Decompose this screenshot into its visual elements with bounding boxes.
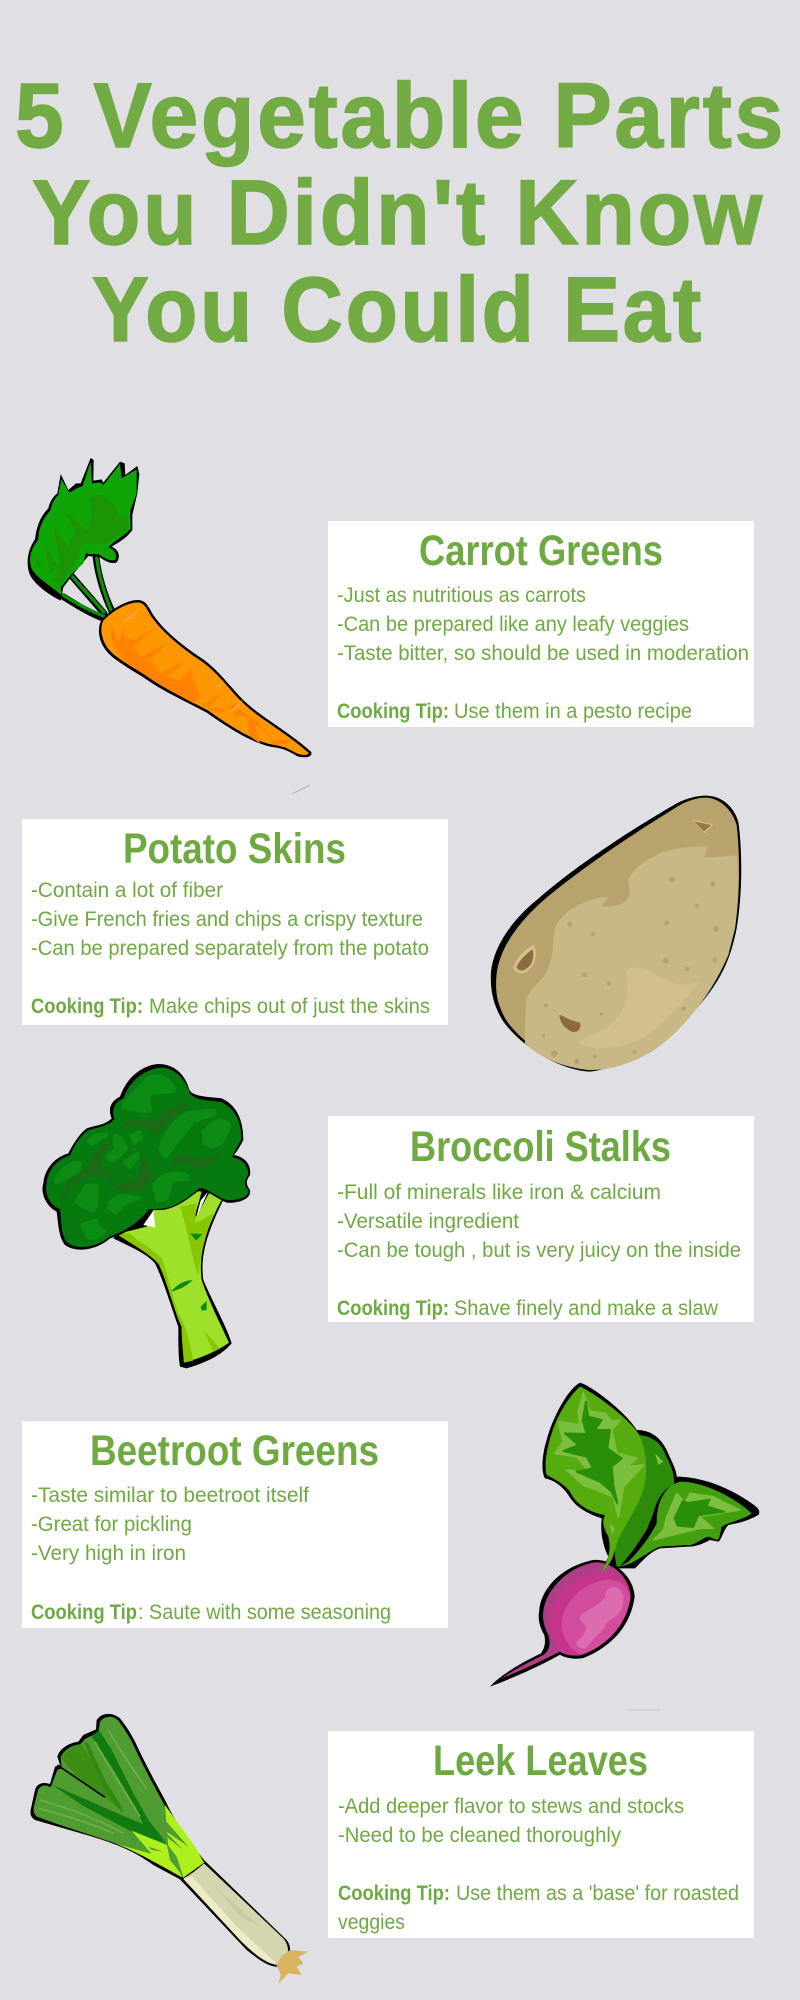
facts: beetroot greens	[31, 1484, 309, 1565]
panel: broccoli stalks	[328, 1116, 754, 1322]
faint stray mark	[627, 1709, 660, 1711]
facts: beetroot greens: -Taste similar to beetroot itself	[31, 1484, 309, 1507]
facts: carrot greens: -Taste bitter, so should be used in moderation	[337, 642, 749, 665]
cooking tip: leek leaves	[338, 1882, 739, 1934]
cooking tip: leek leaves: veggies	[338, 1911, 405, 1934]
illustration: leek	[30, 1714, 308, 1984]
potato eyes	[513, 820, 713, 1032]
panel: leek leaves	[328, 1731, 754, 1938]
cooking tip: carrot greens: Cooking Tip:	[337, 700, 449, 723]
cooking tip: beetroot greens: : Saute with some seasoning	[138, 1601, 391, 1624]
facts: broccoli stalks: -Can be tough , but is very juicy on the inside	[337, 1239, 741, 1262]
panel: carrot greens	[328, 521, 754, 727]
cooking tip: carrot greens	[337, 700, 692, 723]
panel: potato skins	[22, 819, 448, 1025]
facts: potato skins: -Can be prepared separately from the potato	[31, 937, 429, 960]
facts: beetroot greens: -Great for pickling	[31, 1513, 192, 1536]
facts: leek leaves: -Need to be cleaned thoroughly	[338, 1824, 621, 1847]
cooking tip: leek leaves: Use them as a 'base' for roasted	[456, 1882, 739, 1905]
faint stray mark	[292, 785, 310, 794]
facts: beetroot greens: -Very high in iron	[31, 1542, 186, 1565]
heading: carrot greens: Carrot Greens	[419, 527, 663, 575]
title: You Didn't Know	[32, 162, 765, 264]
facts: carrot greens	[337, 584, 749, 665]
cooking tip: potato skins: Cooking Tip:	[31, 995, 143, 1018]
illustration: carrot with greens	[28, 458, 311, 757]
facts: potato skins: -Give French fries and chips a crispy texture	[31, 908, 423, 931]
title: You Could Eat	[92, 259, 704, 361]
cooking tip: potato skins: Make chips out of just the skins	[149, 995, 430, 1018]
broccoli shading	[56, 1077, 229, 1237]
potato speckles	[542, 877, 719, 1064]
cooking tip: carrot greens: Use them in a pesto recipe	[454, 700, 692, 723]
cooking tip: beetroot greens: Cooking Tip	[31, 1601, 137, 1624]
facts: carrot greens: -Can be prepared like any leafy veggies	[337, 613, 689, 636]
illustration: potato	[491, 796, 741, 1072]
title	[15, 65, 786, 361]
cooking tip: broccoli stalks: Shave finely and make a slaw	[454, 1297, 719, 1320]
heading: potato skins: Potato Skins	[123, 825, 346, 873]
heading: beetroot greens: Beetroot Greens	[90, 1427, 379, 1475]
heading: broccoli stalks: Broccoli Stalks	[410, 1123, 671, 1171]
cooking tip: beetroot greens	[31, 1601, 391, 1624]
facts: potato skins	[31, 879, 429, 960]
cooking tip: broccoli stalks	[337, 1297, 719, 1320]
facts: broccoli stalks: -Full of minerals like iron & calcium	[337, 1181, 661, 1204]
facts: broccoli stalks	[337, 1181, 741, 1262]
cooking tip: potato skins	[31, 995, 430, 1018]
illustration: broccoli	[42, 1064, 250, 1368]
facts: potato skins: -Contain a lot of fiber	[31, 879, 223, 902]
facts: leek leaves	[338, 1795, 684, 1847]
cooking tip: broccoli stalks: Cooking Tip:	[337, 1297, 449, 1320]
cooking tip: leek leaves: Cooking Tip:	[338, 1882, 450, 1905]
facts: carrot greens: -Just as nutritious as carrots	[337, 584, 586, 607]
facts: broccoli stalks: -Versatile ingredient	[337, 1210, 519, 1233]
illustration: beetroot	[490, 1383, 759, 1687]
beet leaf veins	[555, 1393, 740, 1540]
heading: leek leaves: Leek Leaves	[433, 1737, 648, 1785]
panel: beetroot greens	[22, 1421, 448, 1628]
leek leaf grooves	[38, 1730, 167, 1844]
facts: leek leaves: -Add deeper flavor to stews and stocks	[338, 1795, 684, 1818]
